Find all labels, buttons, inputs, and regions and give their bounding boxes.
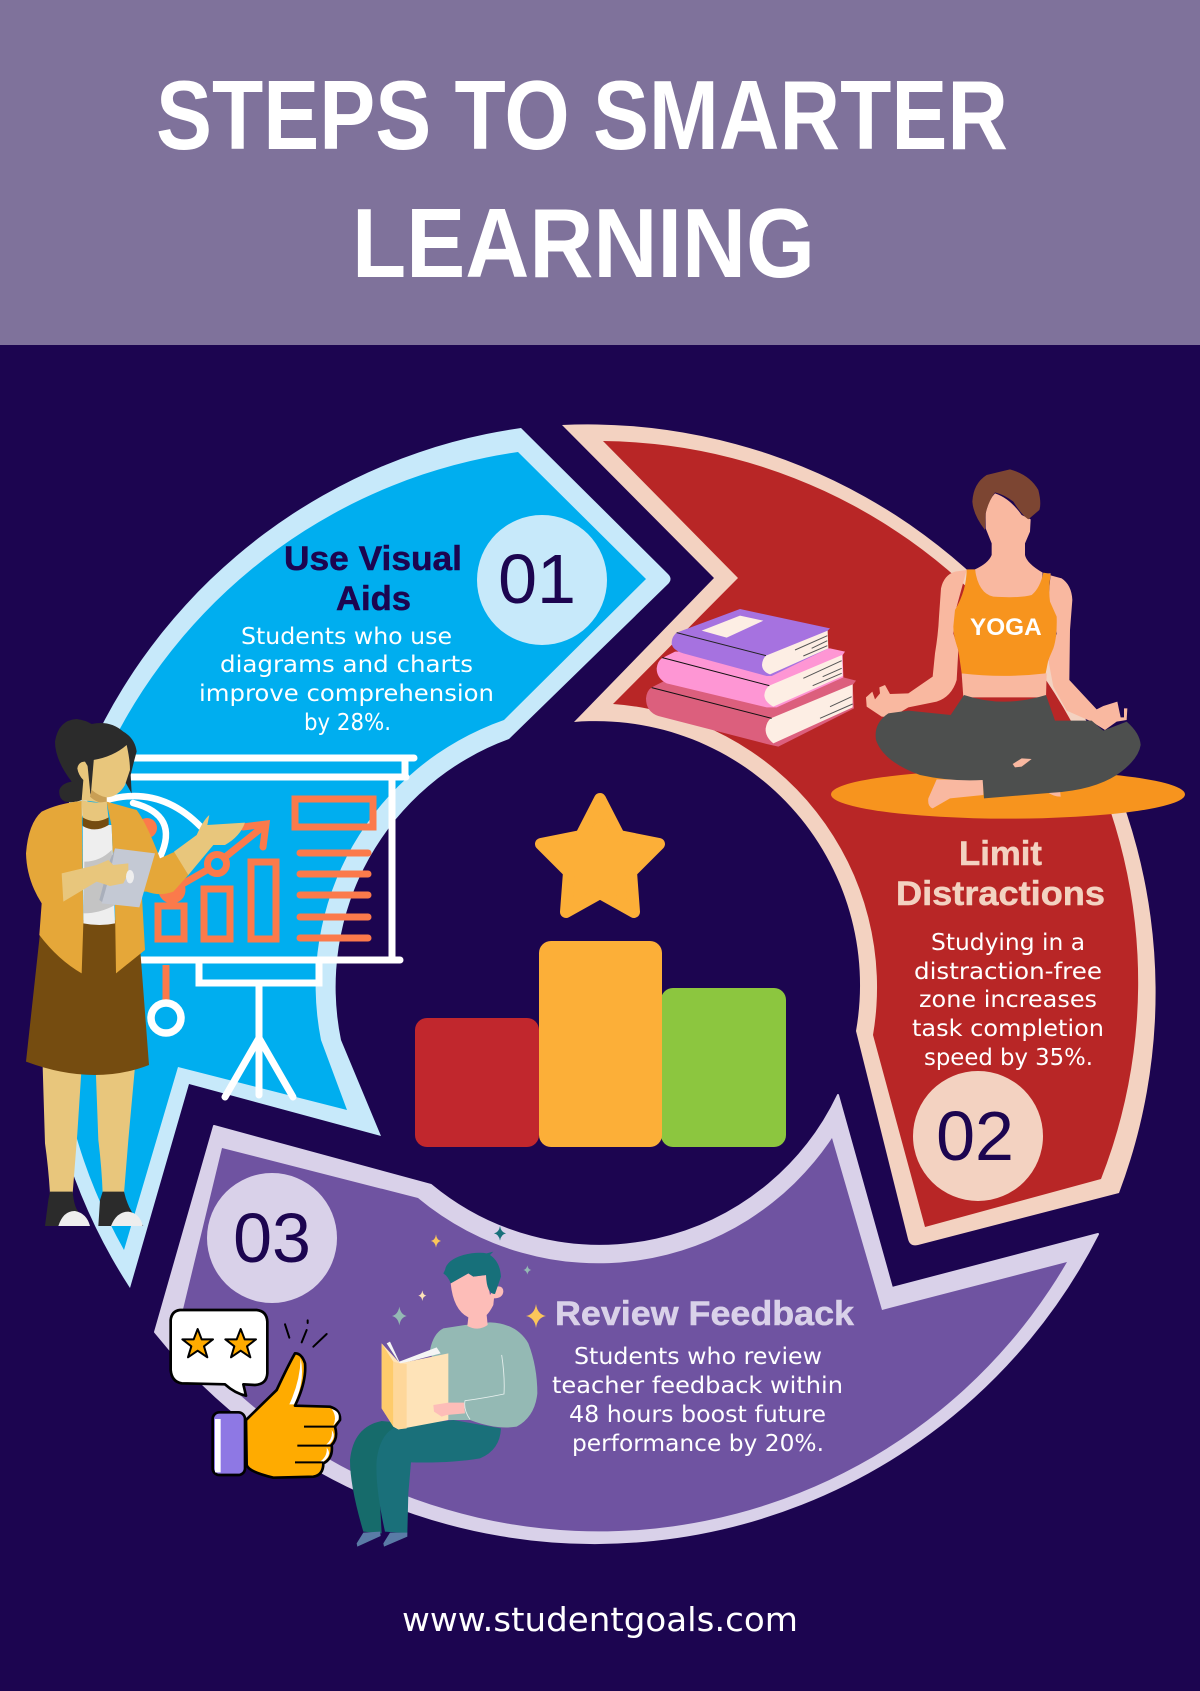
- body: review feedback: [552, 1342, 843, 1457]
- body: limit distractions: Studying in a: [931, 928, 1085, 956]
- outstretched arm: [174, 815, 245, 875]
- heading: review feedback: Review Feedback: [555, 1295, 854, 1333]
- heading: limit distractions: Limit: [959, 835, 1042, 873]
- jacket: [26, 801, 188, 973]
- panel: step 3 review feedback: [155, 1095, 1098, 1543]
- body: use visual aids: Students who use: [241, 622, 452, 650]
- bottom book: [646, 677, 856, 747]
- body: limit distractions: [912, 928, 1104, 1071]
- header banner: [0, 0, 1200, 345]
- skirt: [26, 920, 149, 1075]
- collar: [83, 817, 109, 829]
- body: review feedback: Students who review: [574, 1342, 822, 1370]
- reading hand: [433, 1403, 465, 1417]
- left arm: [866, 570, 967, 717]
- body: review feedback: teacher feedback within: [552, 1371, 843, 1399]
- face and neck: [975, 493, 1043, 600]
- neck and face: [451, 1273, 503, 1329]
- shoes: [45, 1192, 143, 1226]
- body: limit distractions: task completion: [912, 1014, 1104, 1042]
- top text: YOGA: [970, 614, 1042, 641]
- right arm: [1043, 573, 1127, 730]
- body: limit distractions: zone increases: [919, 985, 1097, 1013]
- body: review feedback: 48 hours boost future: [569, 1400, 826, 1428]
- star: [541, 799, 659, 912]
- podium bar: green: [661, 988, 786, 1147]
- feet: [928, 779, 1061, 808]
- illustration: yoga woman on mat: [831, 469, 1185, 819]
- body: review feedback: performance by 20%.: [572, 1429, 824, 1457]
- middle book: [657, 648, 845, 707]
- hand on tablet: [62, 860, 134, 902]
- icon: podium with star: [415, 799, 786, 1147]
- sweater: [430, 1322, 537, 1427]
- thumb hand: [246, 1353, 340, 1478]
- neck: [82, 800, 109, 827]
- shirt: [83, 825, 115, 925]
- tablet: [99, 848, 155, 907]
- open book: [382, 1342, 448, 1429]
- illustration: reading student: [350, 1226, 546, 1547]
- icon: thumbs up with rating bubble: [171, 1310, 340, 1478]
- board pointer circle: [151, 1003, 181, 1033]
- badge: 01: 01: [498, 540, 576, 618]
- heading: use visual aids: Use Visual: [284, 540, 462, 578]
- sleeve highlight: [465, 1355, 504, 1419]
- back leg: [350, 1421, 407, 1533]
- hair: [443, 1252, 501, 1294]
- ankle: [1013, 758, 1032, 767]
- icon: stack of books: [646, 609, 856, 747]
- hair strand: [87, 757, 94, 797]
- illustration: presenter woman: [26, 719, 245, 1226]
- badge: 01: [477, 515, 607, 645]
- title: STEPS TO SMARTER: [156, 60, 1008, 170]
- cuff: [213, 1412, 245, 1475]
- panel: step 1 use visual aids: [39, 428, 671, 1288]
- midriff: [962, 673, 1047, 697]
- body: use visual aids: improve comprehension: [199, 679, 494, 707]
- heading: limit distractions: [896, 835, 1105, 913]
- title: [156, 60, 1008, 298]
- badge: 02: [913, 1071, 1043, 1201]
- hair: [55, 719, 137, 802]
- eye diagram: [107, 796, 201, 857]
- orange top: [953, 569, 1057, 676]
- crossed legs: [876, 695, 1141, 798]
- shirt shadow: [83, 850, 115, 913]
- mat: [831, 770, 1185, 819]
- title: LEARNING: [352, 188, 815, 298]
- badge: 03: [207, 1173, 337, 1303]
- shoes: [357, 1532, 407, 1547]
- board frame: [125, 758, 414, 1097]
- board chart in orange: [158, 799, 373, 1000]
- sparkles: [392, 1226, 546, 1328]
- body: limit distractions: speed by 35%.: [924, 1043, 1093, 1071]
- face: [77, 745, 130, 803]
- emphasis ticks: [285, 1320, 327, 1347]
- heading: limit distractions: Distractions: [896, 875, 1105, 913]
- legs: [43, 1067, 135, 1193]
- body: use visual aids: [199, 622, 494, 736]
- front leg: [376, 1420, 501, 1533]
- heading: use visual aids: [284, 540, 462, 618]
- badge: 03: 03: [233, 1199, 311, 1277]
- hair: [972, 469, 1040, 530]
- neck shadow: [90, 790, 107, 803]
- illustration: presentation board: [107, 758, 414, 1097]
- rating bubble: [171, 1310, 267, 1396]
- body: use visual aids: diagrams and charts: [220, 650, 473, 678]
- body: use visual aids: by 28%.: [304, 708, 391, 736]
- body: limit distractions: distraction-free: [914, 957, 1102, 985]
- panel: step 2 limit distractions: [562, 424, 1156, 1245]
- finger lines: [295, 1427, 335, 1462]
- podium bar: red: [415, 1018, 539, 1147]
- podium bar: orange: [539, 941, 662, 1147]
- top book: [672, 609, 830, 676]
- badge: 02: 02: [936, 1097, 1014, 1175]
- heading: use visual aids: Aids: [336, 580, 411, 618]
- footer url: www.studentgoals.com: [402, 1600, 798, 1639]
